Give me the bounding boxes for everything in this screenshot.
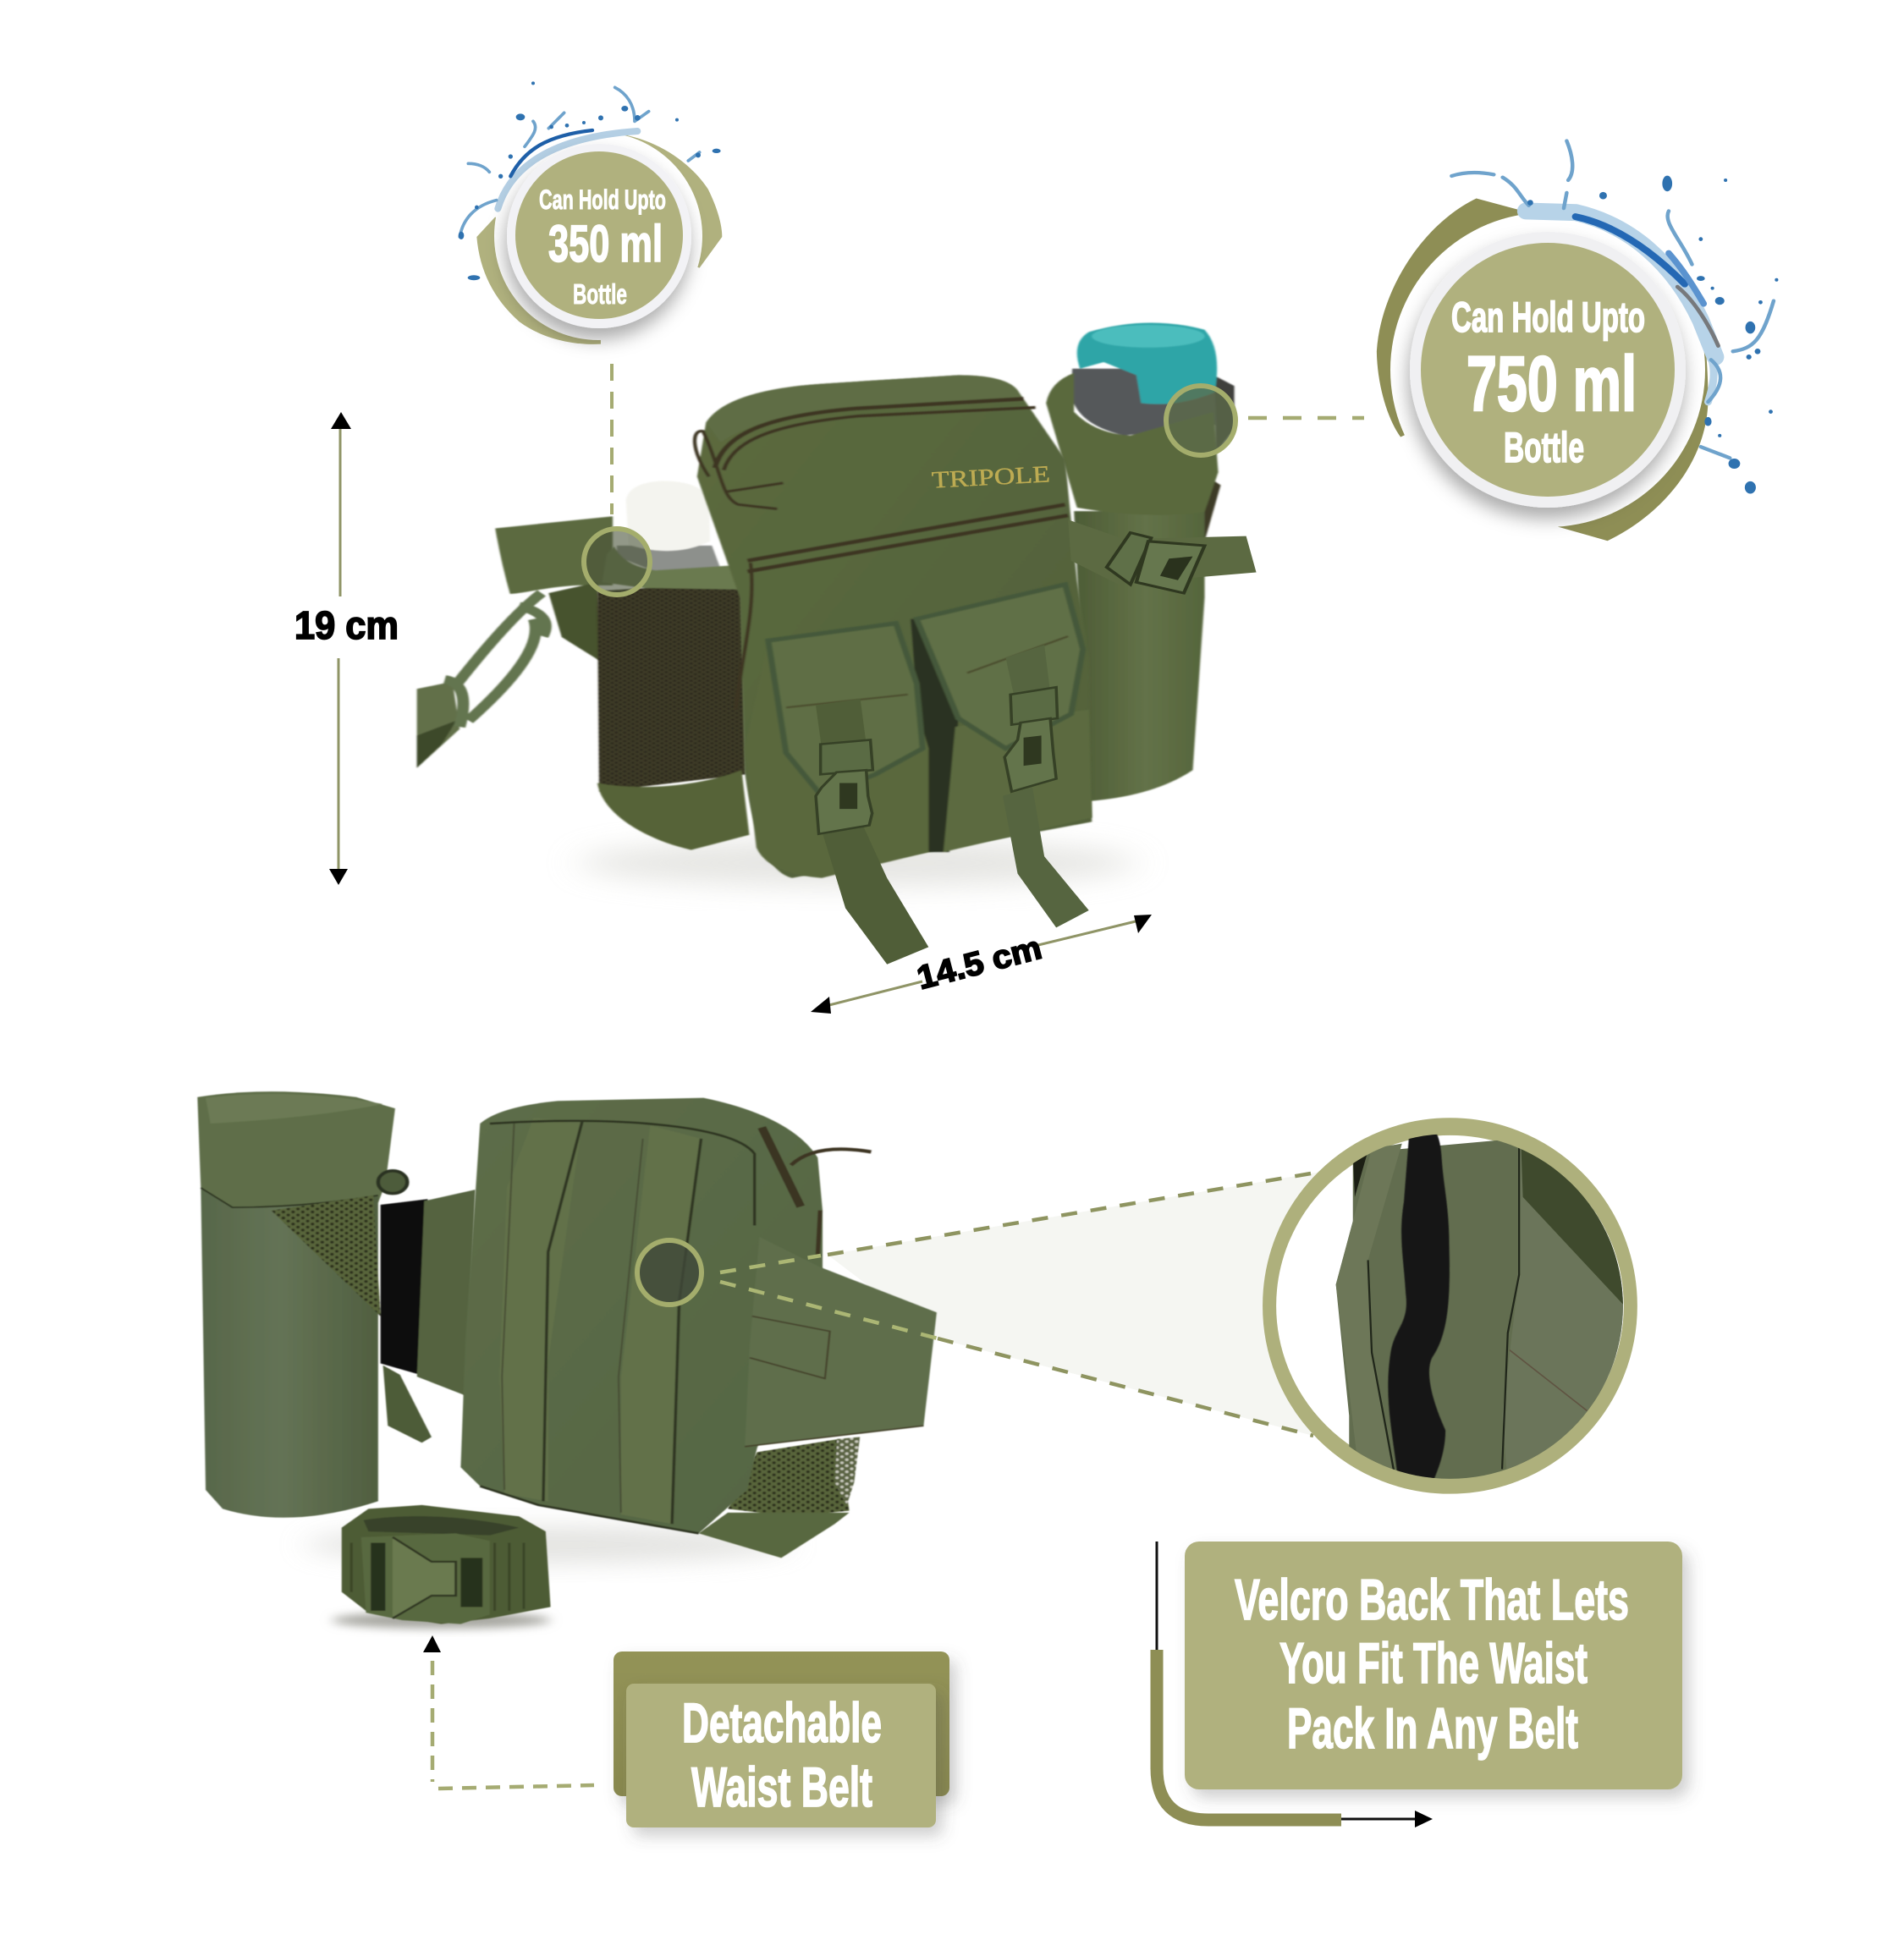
- label text: Pack In Any Belt: [1287, 1696, 1578, 1761]
- callout ring: large bottle on pack: [1166, 386, 1235, 455]
- label text: You Fit The Waist: [1279, 1631, 1588, 1695]
- dimension: width 14.5 cm: [811, 915, 1152, 1014]
- badge: 750 ml: [1377, 141, 1778, 541]
- dashed leader to 750 ml badge: [1248, 416, 1364, 420]
- callout ring: small bottle on pack: [584, 529, 650, 595]
- text: can hold upto 350 ml bottle: Bottle: [573, 278, 627, 310]
- zippers and pull cords: [695, 398, 1068, 710]
- bracket arrow around velcro label: [1157, 1542, 1433, 1827]
- main compartment: [695, 375, 1092, 878]
- text: can hold upto 750 ml bottle: Can Hold Upto: [1451, 294, 1645, 341]
- callout ring: velcro location: [637, 1240, 702, 1305]
- right bottle holder with teal bottle: [1046, 322, 1235, 801]
- main pack rear with belt straps: [460, 1098, 871, 1533]
- text: can hold upto 350 ml bottle: [539, 184, 666, 310]
- side strap and buckle: [1068, 519, 1257, 593]
- waist belt left: [417, 516, 613, 768]
- label text: Velcro Back That Lets: [1235, 1568, 1629, 1632]
- belt roll with buckle: [342, 1505, 551, 1624]
- text: can hold upto 750 ml bottle: Bottle: [1504, 424, 1584, 471]
- dimension: height 19 cm: 19 cm: [294, 603, 399, 647]
- badge: 350 ml: [459, 81, 722, 344]
- label: velcro back: [1185, 1542, 1682, 1789]
- text: can hold upto 350 ml bottle: Can Hold Upto: [539, 184, 666, 215]
- label: detachable waist belt: [614, 1651, 949, 1827]
- text: can hold upto 750 ml bottle: [1451, 294, 1645, 471]
- crescent small: [476, 134, 722, 344]
- text: can hold upto 750 ml bottle: 750 ml: [1467, 341, 1637, 427]
- label text: Detachable: [682, 1691, 882, 1754]
- magnified circle: velcro detail: [1269, 1125, 1631, 1485]
- crescent large: [1377, 199, 1708, 541]
- pocket straps and buckles: [816, 645, 1089, 965]
- dashed leader to 350 ml badge: [610, 364, 614, 514]
- detached bottle holder: [197, 1091, 476, 1518]
- dimension: height 19 cm: [294, 412, 399, 885]
- dimension: width 14.5 cm: 14.5 cm: [913, 930, 1045, 997]
- label text: [1235, 1568, 1629, 1761]
- water splash small: [459, 81, 721, 280]
- mesh corner of main pack: [699, 1437, 860, 1558]
- front pockets with flaps: [745, 585, 1092, 878]
- dashed leaders from velcro ring to zoom: [720, 1172, 1321, 1436]
- label text: [682, 1691, 882, 1818]
- zoom cone: velcro callout: [828, 1172, 1321, 1436]
- pack flap: [745, 1237, 937, 1447]
- label text: Waist Belt: [691, 1756, 872, 1818]
- text: can hold upto 350 ml bottle: 350 ml: [548, 215, 663, 272]
- dashed leader to detachable belt: [423, 1635, 594, 1789]
- product photo: back view of waist pack: [197, 1091, 937, 1629]
- left mesh bottle pocket with small bottle: [597, 481, 749, 850]
- brand name on pack: TRIPOLE: [931, 461, 1051, 494]
- water splash large: [1451, 141, 1778, 493]
- product photo: front view of waist pack: [417, 322, 1257, 965]
